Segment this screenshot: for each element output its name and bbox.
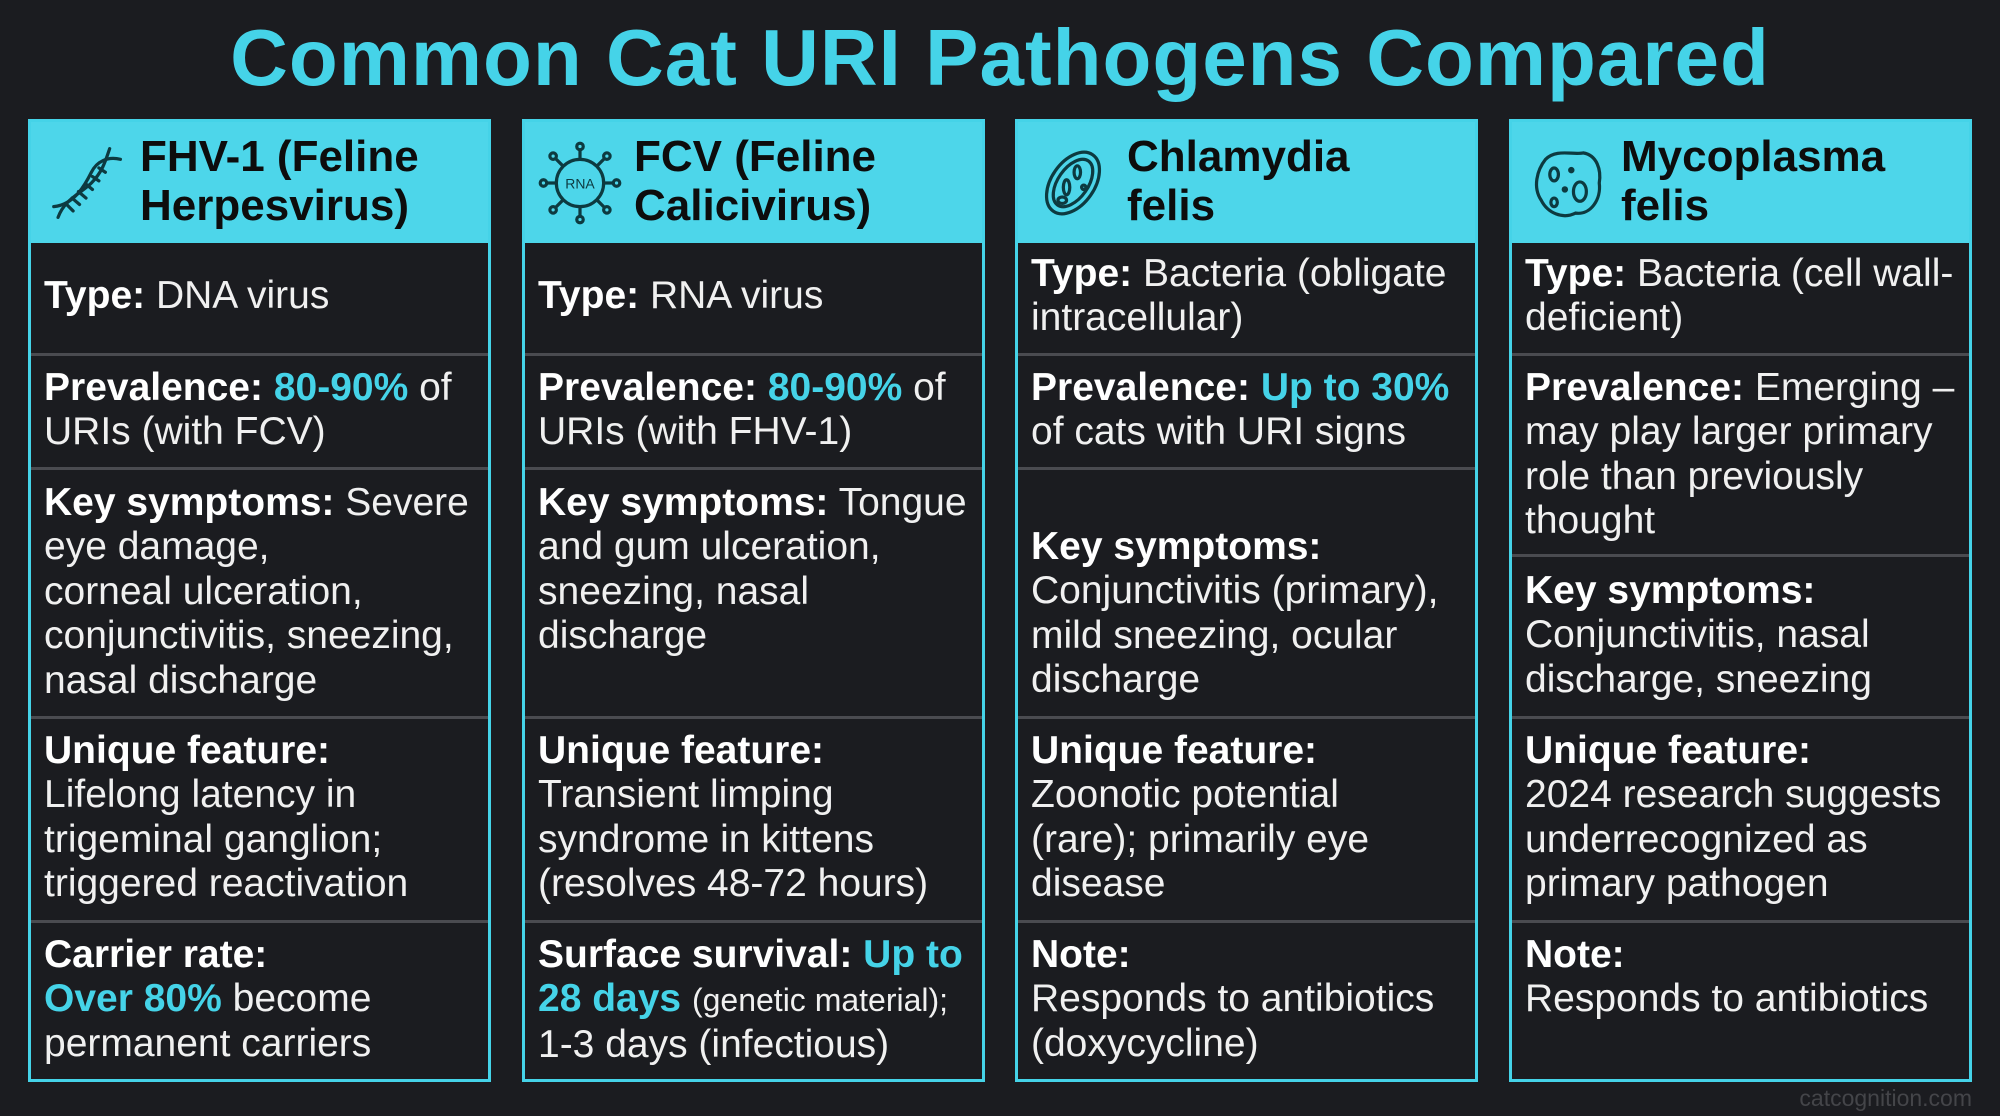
text: key symptoms: sneezing, nasal [538, 570, 809, 613]
text: surface survival: 28 days (genetic material); [538, 977, 948, 1020]
text: unique feature: Unique feature: [1031, 729, 1317, 772]
text: carrier rate: Over 80% become [44, 977, 371, 1020]
text: key symptoms: discharge [538, 614, 707, 657]
panel: Mycoplasma [1509, 119, 1972, 1082]
text: note [1525, 933, 1928, 1020]
text: prevalence: Prevalence: 80-90% of [538, 366, 946, 409]
text: unique feature [538, 729, 928, 905]
text: key symptoms: Conjunctivitis (primary), [1031, 569, 1438, 612]
text: key symptoms: discharge [1031, 658, 1200, 701]
text: unique feature: primary pathogen [1525, 862, 1829, 905]
text: unique feature [44, 729, 408, 905]
text: prevalence: may play larger primary [1525, 410, 1932, 453]
header: FHV-1: FHV-1 (Feline [140, 132, 419, 181]
header: Chlamydia: felis [1127, 181, 1215, 230]
text: unique feature: Transient limping [538, 773, 834, 816]
header: Chlamydia: Chlamydia [1127, 132, 1350, 181]
header: Mycoplasma: felis [1621, 181, 1709, 230]
text: carrier rate: Carrier rate: [44, 933, 267, 976]
header: Mycoplasma: Mycoplasma [1621, 132, 1885, 181]
text: note [1031, 933, 1434, 1065]
text: key symptoms [1031, 525, 1438, 701]
icon: mycoplasma cell [1534, 151, 1602, 218]
text: carrier rate [44, 933, 371, 1065]
text: note: Note: [1031, 933, 1131, 976]
text: unique feature: trigeminal ganglion; [44, 818, 382, 861]
text: note: Note: [1525, 933, 1625, 976]
header: FHV-1: Herpesvirus) [140, 181, 409, 230]
text: key symptoms [44, 481, 469, 702]
header: FCV [525, 122, 982, 243]
icon: RNA virus [538, 142, 622, 224]
text: key symptoms: Key symptoms: Tongue [538, 481, 967, 524]
text: type: intracellular) [1031, 296, 1243, 339]
text: prevalence: Prevalence: 80-90% of [44, 366, 452, 409]
text: key symptoms: Conjunctivitis, nasal [1525, 613, 1870, 656]
text: surface survival: 1-3 days (infectious) [538, 1023, 889, 1066]
text: type: deficient) [1525, 296, 1683, 339]
text: key symptoms: discharge, sneezing [1525, 658, 1872, 701]
text: key symptoms: corneal ulceration, [44, 570, 363, 613]
text: prevalence [44, 366, 452, 453]
text: unique feature: Lifelong latency in [44, 773, 356, 816]
text: prevalence [1031, 366, 1449, 453]
text: key symptoms [538, 481, 967, 657]
header: FHV-1 [31, 122, 488, 243]
text: prevalence: Prevalence: Emerging – [1525, 366, 1954, 409]
text: unique feature: Unique feature: [1525, 729, 1811, 772]
header: FCV: Calicivirus) [634, 181, 871, 230]
text: unique feature: Zoonotic potential [1031, 773, 1339, 816]
header: Chlamydia [1018, 122, 1475, 243]
text: key symptoms: Key symptoms: [1031, 525, 1321, 568]
title: Common Cat URI Pathogens Compared [230, 13, 1770, 102]
text: type: Type: DNA virus [44, 274, 329, 317]
text: prevalence: of cats with URI signs [1031, 410, 1406, 453]
text: prevalence: role than previously [1525, 455, 1863, 498]
text: unique feature: triggered reactivation [44, 862, 408, 905]
text: unique feature [1525, 729, 1941, 905]
text: unique feature: underrecognized as [1525, 818, 1868, 861]
panel: FHV-1 [28, 119, 491, 1082]
text: key symptoms: eye damage, [44, 525, 270, 568]
text: key symptoms: Key symptoms: [1525, 569, 1815, 612]
text: unique feature: 2024 research suggests [1525, 773, 1941, 816]
text: surface survival [538, 933, 963, 1066]
text: note: (doxycycline) [1031, 1022, 1259, 1065]
text: key symptoms: nasal discharge [44, 659, 317, 702]
text: key symptoms [1525, 569, 1872, 701]
text: note: Responds to antibiotics [1031, 977, 1434, 1020]
text: prevalence [1525, 366, 1954, 542]
text: unique feature: syndrome in kittens [538, 818, 874, 861]
text: unique feature: (resolves 48-72 hours) [538, 862, 928, 905]
text: type: Type: Bacteria (cell wall- [1525, 252, 1953, 295]
text: key symptoms: Key symptoms: Severe [44, 481, 469, 524]
text: prevalence: URIs (with FHV-1) [538, 410, 852, 453]
text: unique feature: (rare); primarily eye [1031, 818, 1369, 861]
text: key symptoms: conjunctivitis, sneezing, [44, 614, 454, 657]
text: type [1525, 252, 1953, 339]
panel: Chlamydia [1015, 119, 1478, 1082]
text: surface survival: Surface survival: Up to [538, 933, 963, 976]
text: unique feature: Unique feature: [538, 729, 824, 772]
icon: RNA virus: RNA [565, 175, 595, 191]
text: prevalence: thought [1525, 499, 1655, 542]
text: unique feature: Unique feature: [44, 729, 330, 772]
text: prevalence [538, 366, 946, 453]
text: key symptoms: mild sneezing, ocular [1031, 614, 1397, 657]
icon: DNA helix [52, 147, 122, 219]
header: FCV: FCV (Feline [634, 132, 876, 181]
text: unique feature: disease [1031, 862, 1165, 905]
header: Mycoplasma [1512, 122, 1969, 243]
text: type [1031, 252, 1446, 339]
text: carrier rate: permanent carriers [44, 1022, 371, 1065]
text: prevalence: Prevalence: Up to 30% [1031, 366, 1449, 409]
panel: FCV [522, 119, 985, 1082]
text: key symptoms: and gum ulceration, [538, 525, 881, 568]
icon: bacterium [1044, 150, 1102, 216]
text: note: Responds to antibiotics [1525, 977, 1928, 1020]
text: unique feature [1031, 729, 1369, 905]
footer: source: catcognition.com [1799, 1085, 1972, 1111]
text: type: Type: Bacteria (obligate [1031, 252, 1446, 295]
text: prevalence: URIs (with FCV) [44, 410, 326, 453]
text: type: Type: RNA virus [538, 274, 823, 317]
